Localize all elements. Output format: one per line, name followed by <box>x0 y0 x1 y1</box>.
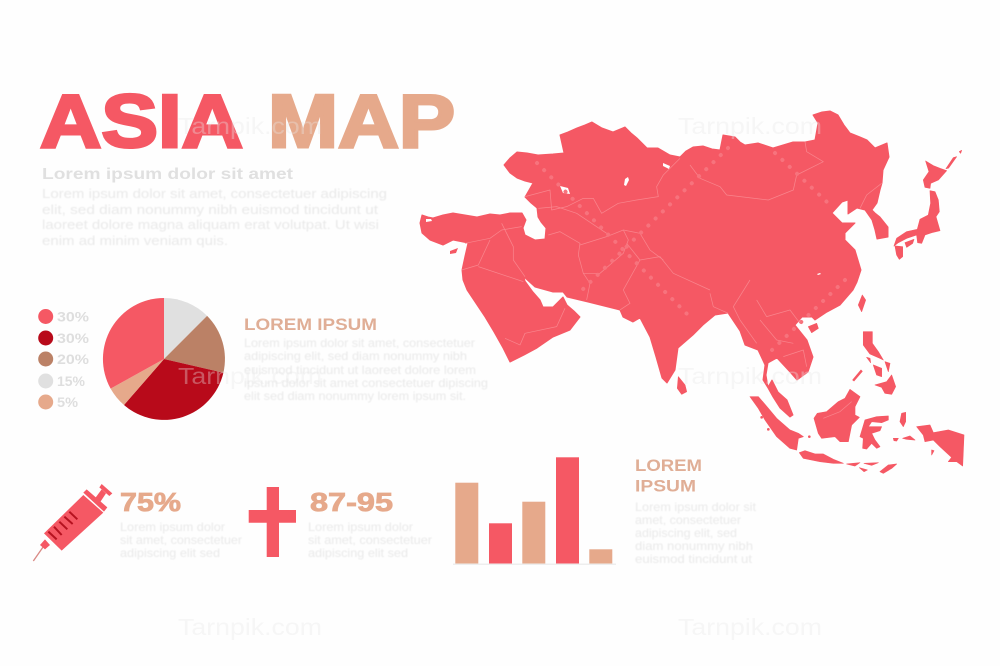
pie chart description: euismod tincidunt ut laoreet dolore lorem <box>244 363 476 377</box>
intro text block: Lorem ipsum dolor sit amet, consectetuer adipiscing <box>42 186 387 201</box>
pie chart legend <box>38 308 90 410</box>
bar chart description: Lorem ipsum dolor sit <box>635 500 757 514</box>
watermarks: Tarnpik.com <box>178 363 322 389</box>
icon: cross <box>249 487 296 557</box>
watermark dots on map <box>537 148 845 350</box>
bar chart description: euismod tincidunt ut <box>635 552 753 566</box>
stat: 87-95: 87-95 <box>310 487 393 517</box>
stat: 75%: 75% <box>120 487 181 517</box>
islands: Japan <box>894 150 962 259</box>
pie chart legend: 30% <box>57 308 90 324</box>
watermarks: Tarnpik.com <box>178 113 322 139</box>
stat: 87-95 <box>308 487 432 560</box>
islands: Indonesia <box>750 389 964 473</box>
islands: Taiwan, Hainan, Sri Lanka, Philippines <box>677 295 896 394</box>
watermarks: Tarnpik.com <box>678 363 822 389</box>
pie chart description: LOREM IPSUM <box>244 316 377 334</box>
intro text block: laoreet dolore magna aliquam erat volutpat. Ut wisi <box>42 217 379 232</box>
title: MAP <box>268 79 455 163</box>
pie chart legend: 15% <box>57 373 86 389</box>
bar chart <box>453 457 616 565</box>
intro text block: enim ad minim veniam quis. <box>42 233 228 248</box>
watermarks: Tarnpik.com <box>678 614 822 640</box>
mainland <box>420 111 889 417</box>
bar chart description <box>635 457 757 566</box>
intro text block: elit, sed diam nonummy nibh euismod tincidunt ut <box>42 202 378 217</box>
bar chart description: amet, consectetuer <box>635 513 741 527</box>
icon: syringe <box>33 484 112 561</box>
watermarks <box>178 113 822 640</box>
stat: 75%: Lorem ipsum dolor <box>120 520 225 534</box>
map of Asia <box>420 111 964 473</box>
country borders: west and central Asia <box>462 158 710 345</box>
country borders: east Asia <box>690 142 882 208</box>
bar chart description: adipiscing elit, sed <box>635 526 737 540</box>
intro text block: Lorem ipsum dolor sit amet <box>42 166 294 183</box>
stat: 75% <box>120 487 242 560</box>
pie chart description: adipiscing elit, sed diam nonummy nibh <box>244 349 467 363</box>
watermarks: Tarnpik.com <box>178 614 322 640</box>
stat: 75%: adipiscing elit sed <box>120 546 220 560</box>
pie chart <box>103 298 225 420</box>
inland lakes <box>426 163 821 275</box>
pie chart description <box>244 316 488 403</box>
bar chart description: IPSUM <box>635 478 696 496</box>
title <box>40 79 455 163</box>
stat: 75%: sit amet, consectetuer <box>120 533 242 547</box>
watermarks: Tarnpik.com <box>678 113 822 139</box>
intro text block <box>42 166 387 248</box>
pie chart description: ipsum dolor sit amet consectetuer dipiscing <box>244 376 488 390</box>
island: Cyprus <box>450 248 458 254</box>
country borders: southeast Asia <box>710 280 852 418</box>
pie chart legend: 20% <box>57 351 90 367</box>
pie chart legend: 30% <box>57 330 90 346</box>
pie chart legend: 5% <box>57 394 79 410</box>
title: ASIA <box>40 79 243 163</box>
bar chart description: diam nonummy nibh <box>635 539 753 553</box>
stat: 87-95: adipiscing elit sed <box>308 546 408 560</box>
stat: 87-95: Lorem ipsum dolor <box>308 520 413 534</box>
stat: 87-95: sit amet, consectetuer <box>308 533 432 547</box>
pie chart description: Lorem ipsum dolor sit amet, consectetuer <box>244 336 475 350</box>
bar chart description: LOREM <box>635 457 702 475</box>
pie chart description: elit sed diam nonummy lorem ipsum sit. <box>244 389 466 403</box>
